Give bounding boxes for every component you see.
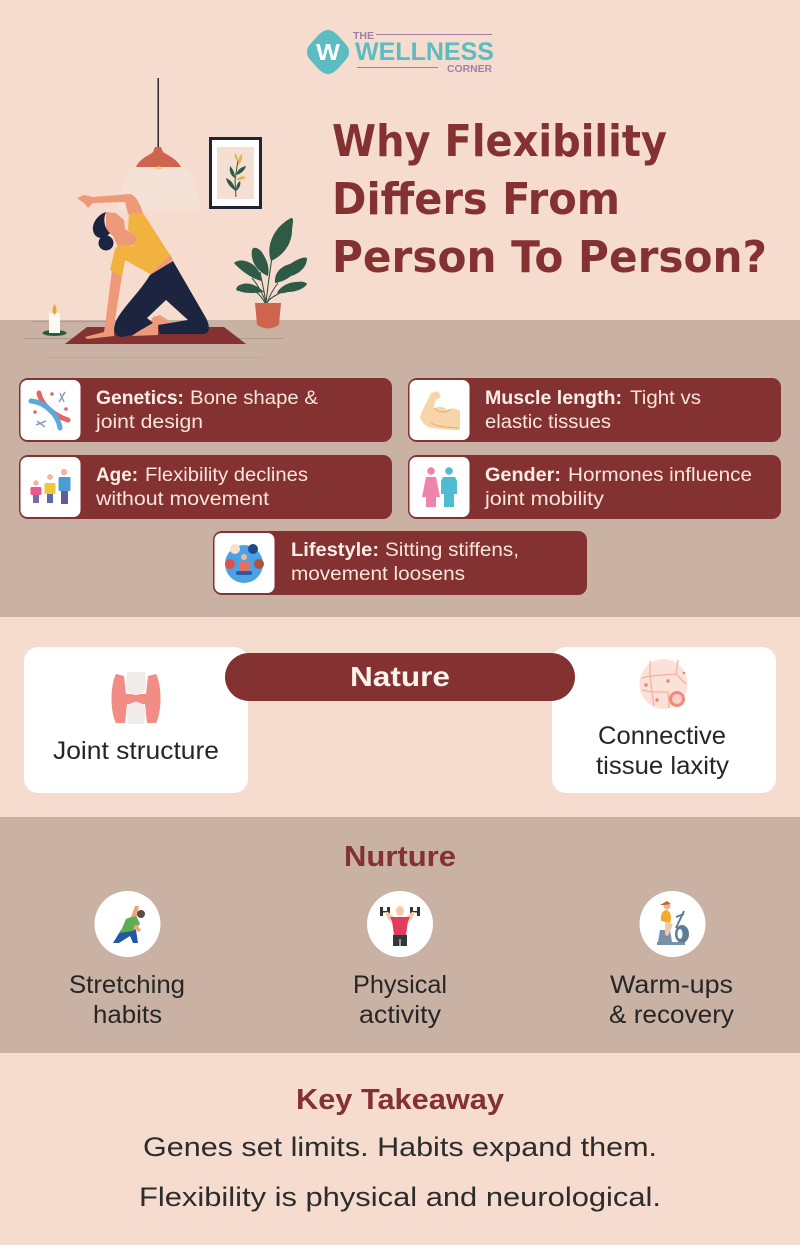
label: Stretching (69, 971, 185, 999)
label (609, 971, 735, 1029)
icon: cells (640, 659, 688, 709)
heading: key takeaway: Key Takeaway (296, 1084, 504, 1116)
foot (132, 315, 171, 336)
text (484, 464, 752, 510)
framed picture (210, 138, 260, 208)
woman stretching (77, 194, 209, 339)
icon: lifestyle circle (214, 533, 274, 593)
raised arm (77, 194, 143, 214)
title (332, 116, 767, 283)
icon: weightlifter (367, 891, 433, 957)
logo: W (316, 39, 340, 65)
top (110, 213, 170, 277)
potted plant (234, 218, 307, 328)
logo: CORNER (447, 64, 493, 75)
text: without movement (95, 488, 270, 510)
icon: exercise bike (640, 891, 706, 957)
takeaway text (139, 1132, 661, 1212)
text: Hormones influence (568, 464, 752, 486)
title: Why Flexibility (332, 116, 667, 167)
candle (42, 304, 66, 336)
neck and face (106, 212, 138, 247)
takeaway text: Flexibility is physical and neurological. (139, 1182, 661, 1212)
text: Tight vs (630, 387, 701, 409)
label: habits (93, 1001, 162, 1029)
illustration: yoga room (24, 78, 307, 358)
text: joint design (95, 411, 203, 433)
text: joint mobility (484, 488, 604, 510)
yoga mat (65, 327, 246, 344)
text (95, 464, 308, 510)
heading pill: nature: Nature (350, 661, 450, 692)
text: Age: (96, 464, 138, 486)
logo (307, 30, 494, 75)
icon: flexed arm (410, 380, 470, 440)
trousers (114, 261, 209, 337)
label: tissue laxity (596, 752, 730, 780)
icon: three figures (20, 457, 80, 517)
text: elastic tissues (485, 411, 611, 433)
icon: stretching person (94, 891, 160, 957)
text: Gender: (485, 464, 561, 486)
heading pill: nature (225, 653, 575, 701)
text: Genetics: (96, 387, 184, 409)
text: Sitting stiffens, (385, 539, 519, 561)
panel: factors (0, 78, 800, 617)
item: physical activity (353, 891, 447, 1029)
card: connective tissue (552, 647, 776, 793)
label: Joint structure (53, 737, 219, 765)
text: Bone shape & (190, 387, 318, 409)
text (95, 387, 318, 433)
icon: dna (20, 380, 80, 440)
title: Person To Person? (332, 232, 767, 283)
card: age (19, 455, 392, 519)
hair (93, 212, 110, 238)
logo: WELLNESS (355, 38, 494, 66)
floor lines (24, 321, 284, 358)
title: Differs From (332, 174, 620, 225)
logo: THE (353, 31, 374, 42)
icon: joint (112, 672, 160, 724)
panel: nurture (0, 817, 800, 1053)
card: muscle length (408, 378, 781, 442)
label: Warm-ups (610, 971, 733, 999)
label (596, 722, 730, 780)
text: Lifestyle: (291, 539, 379, 561)
text (485, 387, 701, 433)
text: Muscle length: (485, 387, 622, 409)
label: Connective (598, 722, 726, 750)
label: & recovery (609, 1001, 735, 1029)
label (69, 971, 185, 1029)
card: lifestyle (213, 531, 587, 595)
card: joint structure (24, 647, 248, 793)
card: gender (408, 455, 781, 519)
text: Flexibility declines (145, 464, 308, 486)
panel: key takeaway (0, 1053, 800, 1245)
card: genetics (19, 378, 392, 442)
lamp (118, 78, 200, 210)
item: warm-ups (609, 891, 735, 1029)
heading: nurture: Nurture (344, 841, 456, 873)
panel: nature (0, 617, 800, 817)
takeaway text: Genes set limits. Habits expand them. (143, 1132, 657, 1162)
icon: woman and man (410, 457, 470, 517)
label (353, 971, 447, 1029)
label: activity (359, 1001, 442, 1029)
text (291, 539, 519, 585)
support arm (85, 270, 122, 339)
label: Physical (353, 971, 447, 999)
midriff (150, 254, 173, 276)
item: stretching (69, 891, 185, 1029)
text: movement loosens (291, 563, 465, 585)
